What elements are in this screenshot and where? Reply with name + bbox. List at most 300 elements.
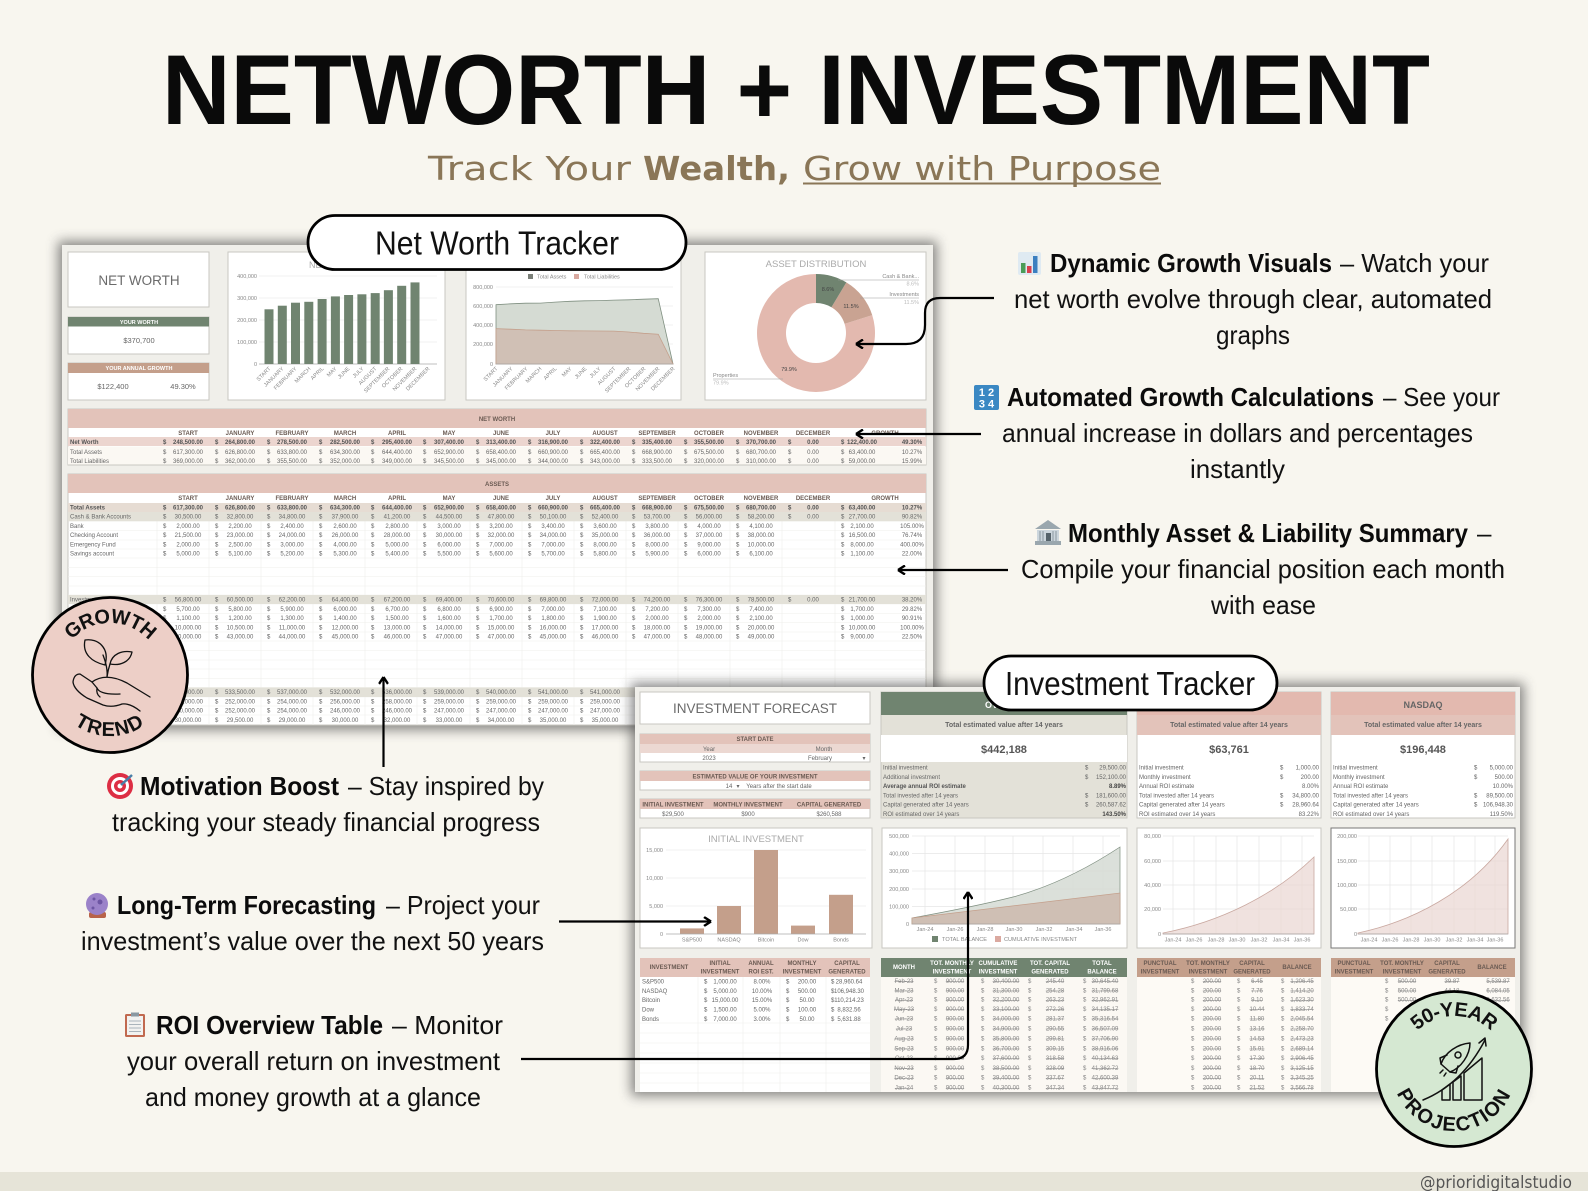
callout: dynamic growth visuals [1014,248,1492,350]
table: assets: APRIL [388,496,406,502]
table: S&P500 monthly: 13.16 [1249,1026,1265,1032]
label: investment tracker: Investment Tracker [1005,665,1255,702]
table: ROI overview: 10.00% [752,989,773,995]
table: overview monthly: 347.34 [1046,1086,1065,1092]
table: NASDAQ monthly: BALANCE [1477,965,1507,971]
table: S&P500 monthly: 2,258.70 [1290,1026,1314,1032]
table: assets: 47,000.00 [488,634,515,640]
table: net worth: 15.99% [902,459,923,465]
table: assets: 12,000.00 [332,626,359,632]
table: S&P500 monthly: 6.45 [1251,979,1263,985]
table: net worth: 660,900.00 [538,450,569,456]
subtitle: Track Your [427,149,632,188]
table: net worth: 0.00 [807,450,819,456]
table: overview monthly: 900.00 [946,998,965,1004]
area chart: total balance: Jan-24 [917,927,933,933]
table: assets: 1,900.00 [593,616,617,622]
table: S&P500 monthly: 200.00 [1203,1086,1222,1092]
table: assets: 21,500.00 [175,533,202,539]
table: assets: 530,000.00 [173,690,204,696]
table: assets: 247,000.00 [434,708,465,714]
table: overview monthly: 40,300.00 [993,1086,1020,1092]
NASDAQ summary: $ [1474,775,1478,781]
callout: motivation boost: Motivation Boost [140,771,339,801]
table: assets: NOVEMBER [744,496,779,502]
table: assets: 56,800.00 [175,598,202,604]
callout: long-term forecasting: investment’s value over the next 50 years [81,926,544,956]
S&P500 summary: Capital generated after 14 years [1139,802,1225,808]
area chart: total balance: Jan-30 [1006,927,1022,933]
table: net worth: 316,900.00 [538,440,569,446]
S&P500 summary [1137,692,1321,818]
bar chart: initial investment: Bonds [833,938,849,944]
S&P500 summary: 8.00% [1302,784,1320,790]
table: overview monthly: 900.00 [946,988,965,994]
table: assets: 3,000.00 [437,524,461,530]
NASDAQ summary: 5,000.00 [1490,766,1514,772]
table: assets: 5,500.00 [437,552,461,558]
table: assets: Emergency Fund [70,542,116,548]
icon: clipboard emoji [125,1012,145,1037]
table: NASDAQ monthly: 500.00 [1398,988,1417,994]
area chart: total balance: Jan-34 [1066,927,1082,933]
table: net worth: GROWTH [871,431,899,437]
table: net worth: 345,000.00 [486,459,517,465]
investment forecast inputs: MONTHLY INVESTMENT [713,802,783,808]
table: overview monthly: 32,962.91 [1092,998,1119,1004]
table: assets: 5,000.00 [385,542,409,548]
area chart: total balance: Jan-26 [947,927,963,933]
table: ROI overview: 110,214.23 [834,998,864,1004]
table: NASDAQ monthly: INVESTMENT [1335,970,1374,976]
table: net worth: APRIL [388,431,406,437]
area chart: assets and liabilities: Total Liabilities [584,274,620,280]
area chart: assets and liabilities: NOVEMBER [635,366,661,393]
table: assets: 8,000.00 [645,542,669,548]
table: NASDAQ monthly: 6,632.56 [1486,998,1510,1004]
table: assets: 259,000.00 [590,699,621,705]
callout: automated growth calculations [974,382,1500,484]
investment forecast inputs: 2023 [702,756,716,762]
overview summary: 8.89% [1109,784,1127,790]
table: assets: 45,000.00 [332,634,359,640]
table: S&P500 monthly: 2,045.54 [1290,1016,1314,1022]
table: net worth: 617,300.00 [173,450,204,456]
overview summary: $ [1085,775,1089,781]
table: assets: 53,700.00 [644,515,671,521]
area chart: total balance: Jan-28 [977,927,993,933]
table: S&P500 monthly: 21.52 [1249,1086,1265,1092]
table: assets: 3,800.00 [645,524,669,530]
table: overview monthly: 37,706.90 [1092,1036,1119,1042]
table: overview monthly: TOT. MONTHLY [930,961,974,967]
table: assets: 2,200.00 [228,524,252,530]
table: assets: 29,500.00 [227,718,254,724]
bar chart: monthly net worth: NET WORTH [309,260,363,270]
table: S&P500 monthly: 7.76 [1251,988,1263,994]
table: assets: 2,100.00 [749,616,773,622]
table: assets: 5,000.00 [176,552,200,558]
table: S&P500 monthly: 1,623.30 [1290,998,1314,1004]
arrow: ROI table to area chart [521,893,968,1059]
net worth summary boxes: $122,400 [97,382,129,391]
table: assets: 18,000.00 [644,626,671,632]
title: NETWORTH + INVESTMENT [162,34,1430,145]
table: assets: 258,000.00 [382,699,413,705]
overview summary [881,692,1127,818]
bar chart: initial investment: S&P500 [682,938,702,944]
table: NASDAQ monthly: 44.18 [1444,988,1460,994]
table: overview monthly: 37,600.00 [993,1056,1020,1062]
table: S&P500 monthly: 18.70 [1249,1066,1265,1072]
table: assets: 626,800.00 [225,506,256,512]
table: ROI overview: 15,000.00 [712,998,739,1004]
table: assets: $$$$$$$$$ [163,708,584,714]
table: S&P500 monthly: 9.10 [1251,998,1263,1004]
table: assets: 63,400.00 [849,506,876,512]
table: overview monthly: CUMULATIVE [979,961,1017,967]
overview summary: 152,100.00 [1096,775,1127,781]
table: assets: 44,000.00 [279,634,306,640]
table: net worth: 248,500.00 [173,440,204,446]
table: assets: 3,400.00 [541,524,565,530]
table: assets: AUGUST [592,496,618,502]
table: net worth: 633,800.00 [277,450,308,456]
table: assets: 16,000.00 [540,626,567,632]
table: overview monthly: 34,135.17 [1092,1007,1119,1013]
table: S&P500 monthly: 200.00 [1203,1036,1222,1042]
area chart: total balance: Jan-36 [1095,927,1111,933]
table: assets: 7,100.00 [593,607,617,613]
investment forecast inputs: $900 [741,812,755,818]
area chart: assets and liabilities: JULY [589,366,603,380]
table: assets: 22.00% [902,552,923,558]
area chart: S&P500: 20,000 [1144,907,1161,913]
net worth summary boxes: $370,700 [123,336,155,345]
table: ROI overview: 500.00 [798,989,817,995]
table: assets: $$$$$$$$$$$$$$ [163,598,845,604]
table: overview monthly: INVESTMENT [933,970,972,976]
S&P500 summary: 34,800.00 [1292,794,1320,800]
table: assets: 8,000.00 [850,542,874,548]
table: assets: Savings account [70,552,114,558]
table: overview monthly: 31,799.68 [1092,988,1119,994]
table: assets: 7,200.00 [645,607,669,613]
table: assets: 10,500.00 [227,626,254,632]
table: assets: 644,400.00 [382,506,413,512]
overview summary: 143.50% [1102,812,1127,818]
callout: dynamic growth visuals: net worth evolve through clear, automated [1014,284,1492,314]
bar chart: monthly net worth: DECEMBER [405,366,431,392]
overview summary: $442,188 [981,744,1027,756]
table: ROI overview: INVESTMENT [701,970,740,976]
callout: monthly asset and liability summary: Monthly Asset & Liability Summary [1068,518,1468,548]
arrow: forecasting to bar chart [559,920,710,923]
S&P500 summary: 1,000.00 [1296,766,1320,772]
table: assets: 1,100.00 [176,616,200,622]
table: overview monthly: 309.15 [1046,1046,1065,1052]
icon: plant in hand [73,640,150,711]
table: overview monthly: Oct-23 [895,1056,914,1062]
table: S&P500 monthly: 20.11 [1250,1076,1265,1082]
area chart: total balance: 200,000 [889,887,909,893]
NASDAQ summary: 10.00% [1493,784,1514,790]
table: S&P500 monthly: INVESTMENT [1189,970,1228,976]
table: ROI overview: 7,000.00 [713,1017,737,1023]
table: NASDAQ monthly: PUNCTUAL [1338,961,1371,967]
table: ROI overview: INVESTMENT [650,965,689,971]
table: ROI overview: CAPITAL [834,961,860,967]
S&P500 summary: Initial investment [1139,766,1184,772]
table: assets: 52,400.00 [592,515,619,521]
table: assets: 34,800.00 [279,515,306,521]
table: net worth: 652,900.00 [434,450,465,456]
table: overview monthly: Mar-23 [894,988,914,994]
investment forecast inputs: ESTIMATED VALUE OF YOUR INVESTMENT [692,774,818,780]
area chart: S&P500: 40,000 [1144,883,1161,889]
table: assets: 16,500.00 [849,533,876,539]
table: net worth: 333,500.00 [642,459,673,465]
table: assets: 5,900.00 [645,552,669,558]
table: assets: GROWTH [871,496,899,502]
table: assets: 47,800.00 [488,515,515,521]
area chart: NASDAQ: Jan-30 [1424,938,1440,944]
table: assets: DECEMBER [796,496,831,502]
investment forecast inputs: Years after the start date [746,784,812,790]
bar chart: initial investment [640,828,872,948]
bar chart: monthly net worth: START [256,366,273,383]
callout: motivation boost: tracking your steady financial progress [112,807,540,837]
table: overview monthly: 281.37 [1046,1016,1065,1022]
area chart: NASDAQ: 100,000 [1337,883,1357,889]
table: net worth: $$$$$$$$$$$$$$ [163,450,845,456]
area chart: assets and liabilities: MAY [561,366,574,379]
table: assets: 617,300.00 [173,506,204,512]
table: assets: 5,300.00 [333,552,357,558]
table: assets: Bank [70,524,85,530]
table: assets: 30,000.00 [332,718,359,724]
table: assets: 2,000.00 [697,616,721,622]
table: assets: 6,900.00 [489,607,513,613]
table: overview monthly: Jul-23 [896,1026,913,1032]
bar chart: initial investment: NASDAQ [717,938,741,944]
table: overview monthly: 900.00 [946,1046,965,1052]
NASDAQ summary: NASDAQ [1403,700,1443,710]
table: overview monthly: 36,700.00 [993,1046,1020,1052]
NASDAQ summary [1331,692,1515,818]
table: net worth: 307,400.00 [434,440,465,446]
S&P500 summary: 28,960.64 [1292,802,1320,808]
table: overview monthly: 900.00 [946,1016,965,1022]
table: assets: 247,000.00 [538,708,569,714]
table: assets: 5,700.00 [176,607,200,613]
callout: monthly asset and liability summary: – [1477,518,1492,548]
table: assets: $$$$$$$$$ [163,718,584,724]
table: S&P500 monthly: PUNCTUAL [1144,961,1177,967]
donut chart: asset distribution [705,252,926,400]
table: assets: 247,000.00 [590,708,621,714]
NASDAQ summary: $ [1474,802,1478,808]
table: assets: $$$$$$$$$$$$$$ [163,515,845,521]
callout: automated growth calculations: – See your [1383,382,1500,412]
table: overview monthly: 900.00 [946,1007,965,1013]
table: assets: 60,500.00 [227,598,254,604]
area chart: NASDAQ: Jan-28 [1403,938,1419,944]
bar chart: initial investment: 0 [660,932,663,938]
table: overview monthly: Dec-23 [894,1076,914,1082]
table: ROI overview: 5,000.00 [713,989,737,995]
table: net worth: 0.00 [807,459,819,465]
S&P500 summary: $ [1280,766,1284,772]
NASDAQ summary: 89,500.00 [1486,794,1514,800]
area chart: total balance: TOTAL BALANCE [942,937,987,943]
S&P500 summary: Monthly investment [1139,775,1191,781]
table: overview monthly: 290.55 [1046,1026,1065,1032]
table: assets: 6,700.00 [385,607,409,613]
table: assets: 43,000.00 [227,634,254,640]
bar chart: monthly net worth: MAY [326,366,339,379]
investment forecast inputs: INITIAL INVESTMENT [642,802,704,808]
bar chart: monthly net worth: 300,000 [237,296,257,302]
table: assets: 259,000.00 [486,699,517,705]
table: assets: 250,000.00 [173,699,204,705]
table: net worth: NET WORTH [479,417,515,423]
table: assets: 41,200.00 [384,515,411,521]
table: assets: 2,000.00 [176,542,200,548]
bar chart: monthly net worth: 200,000 [237,318,257,324]
area chart: total balance: 100,000 [889,904,909,910]
table: assets: 0.00 [807,515,819,521]
table: S&P500 monthly: 17.30 [1249,1056,1265,1062]
icon: target emoji [107,773,133,799]
area chart: S&P500: 0 [1158,932,1161,938]
table: NASDAQ monthly: CAPITAL [1434,961,1460,967]
callout: monthly asset and liability summary: with ease [1210,590,1316,620]
table: S&P500 monthly: INVESTMENT [1141,970,1180,976]
table: overview monthly: Aug-23 [894,1036,914,1042]
area chart: assets and liabilities: AUGUST [597,366,618,387]
net worth summary boxes: NET WORTH [98,273,180,288]
investment forecast inputs: CAPITAL GENERATED [797,802,862,808]
table: overview monthly: 337.67 [1046,1076,1065,1082]
table: assets: 7,000.00 [541,607,565,613]
table: assets: 33,000.00 [436,718,463,724]
table: assets: 5,800.00 [228,607,252,613]
area chart: assets and liabilities: 800,000 [473,285,493,291]
table: net worth [68,409,926,465]
table: overview monthly: 263.23 [1046,998,1065,1004]
table: assets: 69,400.00 [436,598,463,604]
table: NASDAQ monthly: 48.51 [1444,998,1460,1004]
table: assets: 10,000.00 [175,626,202,632]
table: ROI overview: 1,500.00 [713,1008,737,1014]
arrow: motivation to table [382,678,385,767]
donut chart: asset distribution: Cash & Bank... [882,274,919,280]
table: S&P500 monthly: 200.00 [1203,1046,1222,1052]
NASDAQ summary: Total invested after 14 years [1333,794,1408,800]
table: net worth: 0.00 [807,440,819,446]
table: assets: 10,000.00 [748,542,775,548]
table: net worth: 49.30% [902,440,923,446]
investment forecast inputs: February [808,756,832,762]
table: overview monthly: 35,316.54 [1092,1016,1119,1022]
table: assets: 17,000.00 [592,626,619,632]
callout: dynamic growth visuals: graphs [1216,320,1290,350]
table: assets: 74,200.00 [644,598,671,604]
table: net worth: 63,400.00 [849,450,876,456]
table: overview monthly: 34,000.00 [993,1016,1020,1022]
table: overview monthly: Nov-23 [894,1066,914,1072]
table: assets: 680,700.00 [746,506,777,512]
table: ROI overview: 106,948.30 [834,989,865,995]
donut chart: asset distribution: 79.9% [713,380,729,386]
table: assets: 27,700.00 [849,515,876,521]
subtitle [427,149,1161,188]
table: overview monthly: 41,362.72 [1092,1066,1119,1072]
table: overview monthly: $$$$$$$$$$$$ [934,979,938,1092]
icon: numbers emoji: 1 2 [979,387,994,399]
table: ROI overview: 5,631.88 [837,1017,861,1023]
table: S&P500 monthly: 2,473.23 [1290,1036,1314,1042]
table: assets: 660,900.00 [538,506,569,512]
table: assets: 11,000.00 [279,626,306,632]
table: overview monthly: 900.00 [946,1056,965,1062]
overview summary: 260,587.62 [1096,802,1127,808]
table: assets: 252,000.00 [225,699,256,705]
area chart: total balance: Jan-32 [1036,927,1052,933]
investment forecast inputs: ▾ [862,756,866,762]
badge: growth trend: TREND [78,712,142,736]
callout: dynamic growth visuals: – Watch your [1340,248,1489,278]
table: assets: 26,000.00 [332,533,359,539]
table: assets: 100.00% [900,626,925,632]
overview summary: 29,500.00 [1099,766,1127,772]
table: assets: 46,000.00 [384,634,411,640]
S&P500 summary: Total invested after 14 years [1139,794,1214,800]
table: assets: 254,000.00 [277,699,308,705]
area chart: S&P500: Jan-36 [1294,938,1310,944]
NASDAQ summary: $196,448 [1400,744,1446,756]
table: assets: 1,300.00 [280,616,304,622]
table: assets: $$$$$$$$$$$$$ [163,542,845,548]
NASDAQ summary: 106,948.30 [1483,802,1514,808]
table: overview monthly: GENERATED [1031,970,1069,976]
table: assets: 19,000.00 [696,626,723,632]
area chart: assets and liabilities [466,252,681,400]
table: assets: 7,000.00 [541,542,565,548]
table: assets: 72,000.00 [592,598,619,604]
table: assets: 1,400.00 [333,616,357,622]
table: assets: 38,000.00 [748,533,775,539]
table: assets: ASSETS [485,482,509,488]
area chart: assets and liabilities: START [483,366,500,383]
table: assets: 658,400.00 [486,506,517,512]
table: assets: 0.00 [807,506,819,512]
area chart: assets and liabilities: JANUARY [492,366,515,389]
table: overview monthly: 900.00 [946,1036,965,1042]
area chart: NASDAQ: 150,000 [1337,859,1357,865]
table: assets: $$$$$$$$$ [163,690,584,696]
area chart: NASDAQ [1331,828,1515,948]
investment forecast inputs: Month [816,747,832,753]
S&P500 summary: $ [1280,802,1284,808]
table: S&P500 monthly: 200.00 [1203,998,1222,1004]
label: net worth tracker: Net Worth Tracker [375,224,619,262]
table: overview monthly: 31,300.00 [993,988,1020,994]
table: assets: 14,000.00 [436,626,463,632]
table: net worth: 680,700.00 [746,450,777,456]
area chart: S&P500: Jan-26 [1186,938,1202,944]
